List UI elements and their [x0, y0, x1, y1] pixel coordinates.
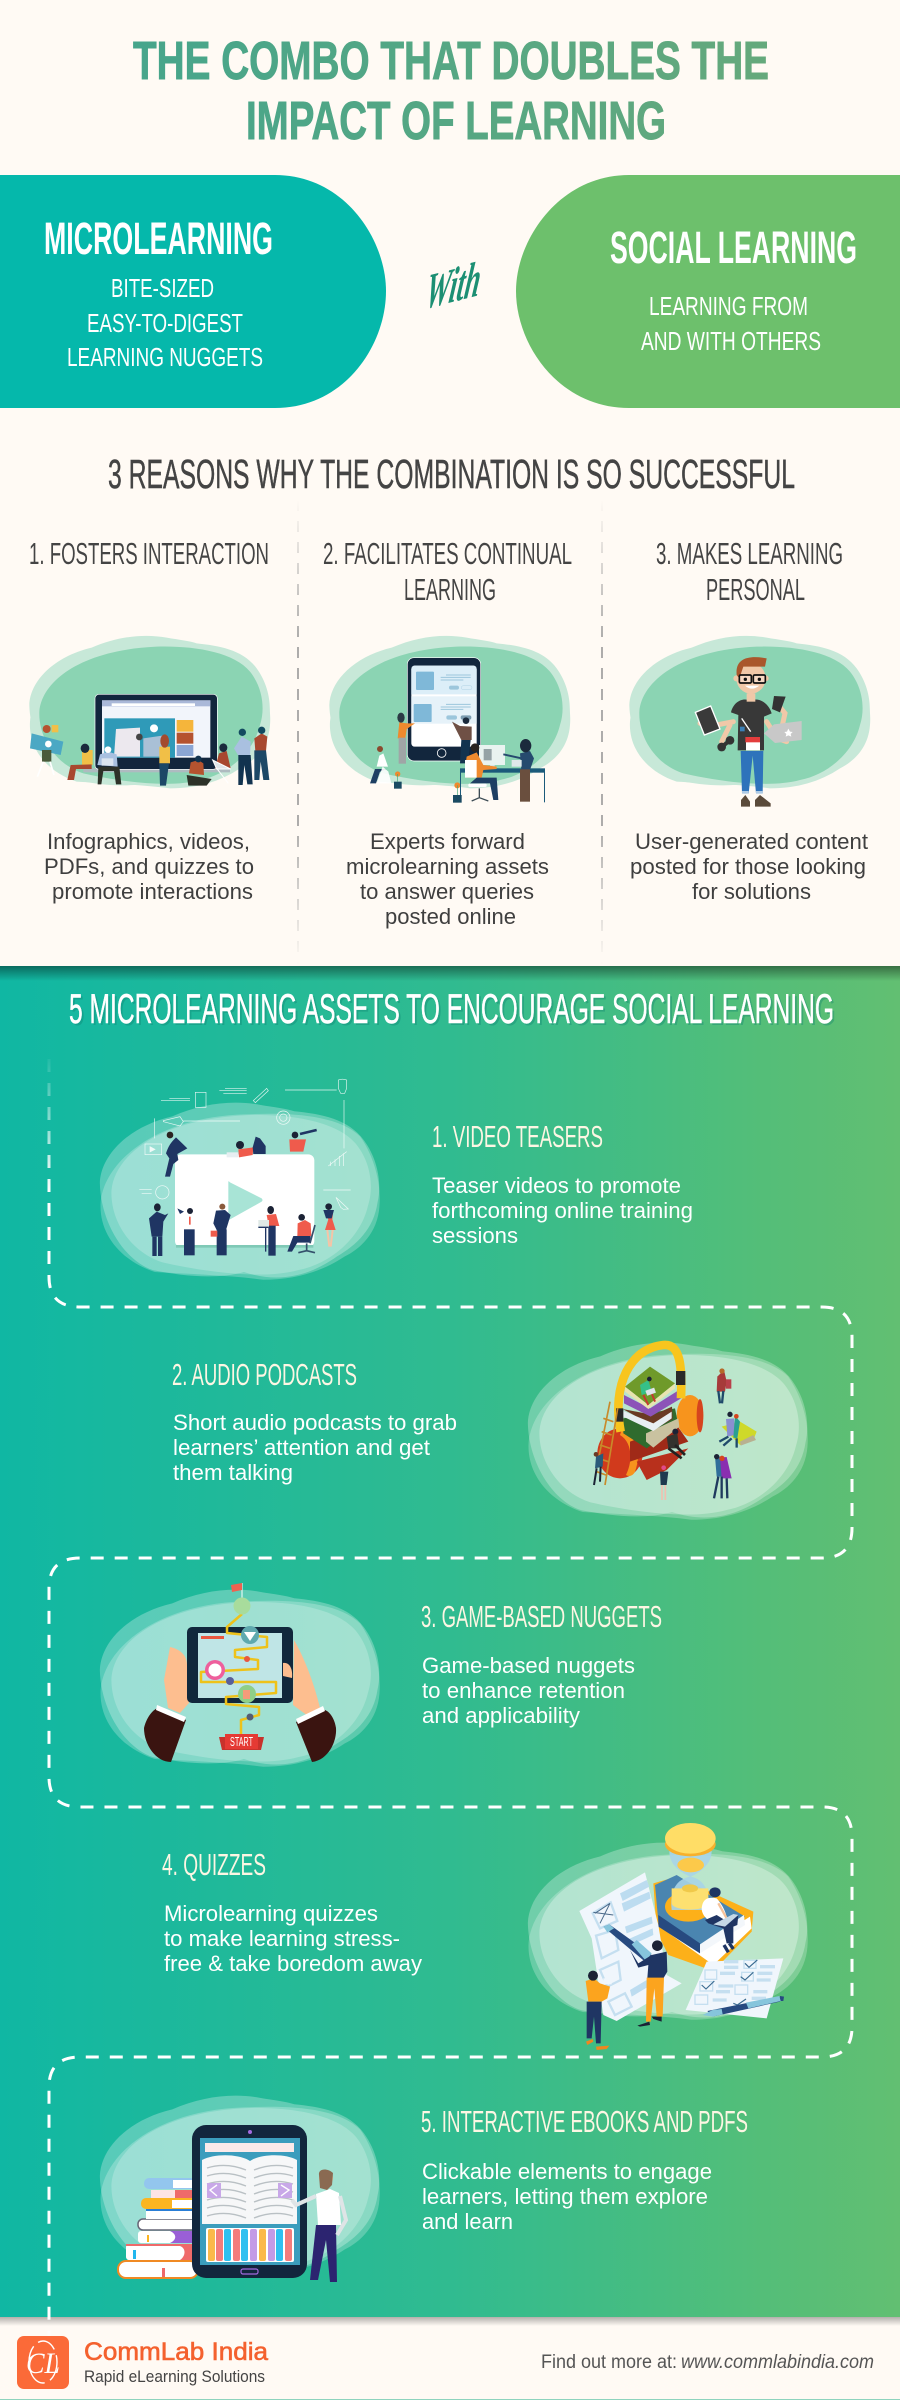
illustration: people around a laptop: [29, 636, 270, 788]
text: quizzes description: free & take boredom away: [164, 1951, 422, 1976]
text: reason 3 description: [630, 829, 868, 904]
text: game-based nuggets description: and applicability: [422, 1703, 580, 1728]
text: quizzes description: [164, 1901, 422, 1976]
text: quizzes description: to make learning stress-: [164, 1926, 400, 1951]
illustration: headphones and books: [528, 1343, 808, 1520]
illustration: hourglass and quiz sheets: [528, 1823, 808, 2050]
text: microlearning description: [67, 273, 263, 372]
illustration: experts and tablet: [329, 636, 570, 803]
text: reason 1 description: [44, 829, 254, 904]
text: interactive ebooks description: and learn: [422, 2209, 513, 2234]
text: reason 2 description: [346, 829, 549, 929]
text: audio podcasts description: learners’ attention and get: [173, 1435, 430, 1460]
text: start banner: START: [230, 1734, 253, 1749]
text: reason 2 description: Experts forward: [370, 829, 525, 854]
heading: quizzes: 4. QUIZZES: [162, 1847, 266, 1882]
text: reason 3 description: for solutions: [692, 879, 811, 904]
people: [398, 722, 415, 738]
text: game-based nuggets description: to enhance retention: [422, 1678, 625, 1703]
illustration: multitasking learner: [629, 636, 870, 807]
heading: game-based nuggets: 3. GAME-BASED NUGGETS: [421, 1599, 662, 1634]
text: reason 3 description: User-generated content: [635, 829, 868, 854]
panel: reason 3: [629, 536, 870, 904]
title: IMPACT OF LEARNING: [246, 91, 666, 151]
logo: commlab india: [17, 2336, 69, 2389]
heading: makes learning personal: [656, 536, 843, 607]
text: reason 1 description: Infographics, videos,: [47, 829, 250, 854]
heading: facilitates continual learning: 2. FACILITATES CONTINUAL: [323, 536, 572, 571]
heading: makes learning personal: PERSONAL: [706, 572, 805, 607]
text: reason 2 description: microlearning assets: [346, 854, 549, 879]
heading: facilitates continual learning: [323, 536, 572, 607]
panel: reason 1: [29, 536, 270, 904]
text: interactive ebooks description: [422, 2159, 712, 2234]
text: game-based nuggets description: [422, 1653, 635, 1728]
text: social learning description: LEARNING FROM: [649, 291, 808, 321]
title: [133, 31, 769, 151]
illustration: hands holding game tablet: [100, 1583, 380, 1767]
text: video teasers description: sessions: [432, 1223, 518, 1248]
footer: [17, 2336, 874, 2389]
panel: microlearning assets background: [0, 966, 900, 2326]
text: microlearning description: BITE-SIZED: [111, 273, 214, 303]
heading: microlearning: MICROLEARNING: [44, 213, 273, 264]
panel: social learning: [516, 175, 900, 408]
panel: asset 4 quizzes: [162, 1823, 808, 2050]
text: audio podcasts description: Short audio podcasts to grab: [173, 1410, 457, 1435]
text: reason 2 description: posted online: [385, 904, 516, 929]
heading: video teasers: 1. VIDEO TEASERS: [432, 1119, 603, 1154]
text: game-based nuggets description: Game-based nuggets: [422, 1653, 635, 1678]
text: reason 1 description: promote interactions: [52, 879, 253, 904]
link text: Find out more at:: [541, 2352, 677, 2373]
panel: asset 2 audio podcasts: [172, 1343, 808, 1520]
panel: reason 2: [323, 536, 572, 929]
illustration: video teasers blob: [100, 1079, 380, 1280]
text: interactive ebooks description: learners, letting them explore: [422, 2184, 708, 2209]
heading: facilitates continual learning: LEARNING: [404, 572, 496, 607]
text: social learning description: AND WITH OTHERS: [641, 326, 821, 356]
text: video teasers description: Teaser videos to promote: [432, 1173, 681, 1198]
brand name: CommLab India: [84, 2338, 268, 2366]
panel: asset 5 interactive ebooks and pdfs: [100, 2096, 748, 2282]
heading: fosters interaction: 1. FOSTERS INTERACTION: [29, 536, 269, 571]
tagline: Rapid eLearning Solutions: [84, 2367, 265, 2386]
heading: audio podcasts: 2. AUDIO PODCASTS: [172, 1357, 357, 1392]
text: interactive ebooks description: Clickable elements to engage: [422, 2159, 712, 2184]
text: microlearning description: EASY-TO-DIGEST: [87, 308, 243, 338]
people: [159, 747, 170, 763]
text: social learning description: [641, 291, 821, 356]
text: reason 3 description: posted for those looking: [630, 854, 866, 879]
logo: commlab india: CL: [26, 2347, 60, 2380]
text: microlearning description: LEARNING NUGGETS: [67, 342, 263, 372]
text: with: With: [422, 250, 485, 320]
text: video teasers description: [432, 1173, 693, 1248]
panel: asset 1 video teasers: [100, 1079, 693, 1280]
panel: asset 3 game-based nuggets: [100, 1583, 662, 1767]
text: reason 1 description: PDFs, and quizzes to: [44, 854, 254, 879]
link text: www.commlabindia.com: [681, 2352, 874, 2373]
panel: microlearning: [0, 175, 386, 408]
text: reason 2 description: to answer queries: [360, 879, 534, 904]
text: video teasers description: forthcoming online training: [432, 1198, 693, 1223]
text: audio podcasts description: them talking: [173, 1460, 293, 1485]
text: audio podcasts description: [173, 1410, 457, 1485]
link text: [541, 2352, 874, 2373]
illustration: ebook on phone with stacked books: [100, 2096, 380, 2282]
text: quizzes description: Microlearning quizzes: [164, 1901, 378, 1926]
